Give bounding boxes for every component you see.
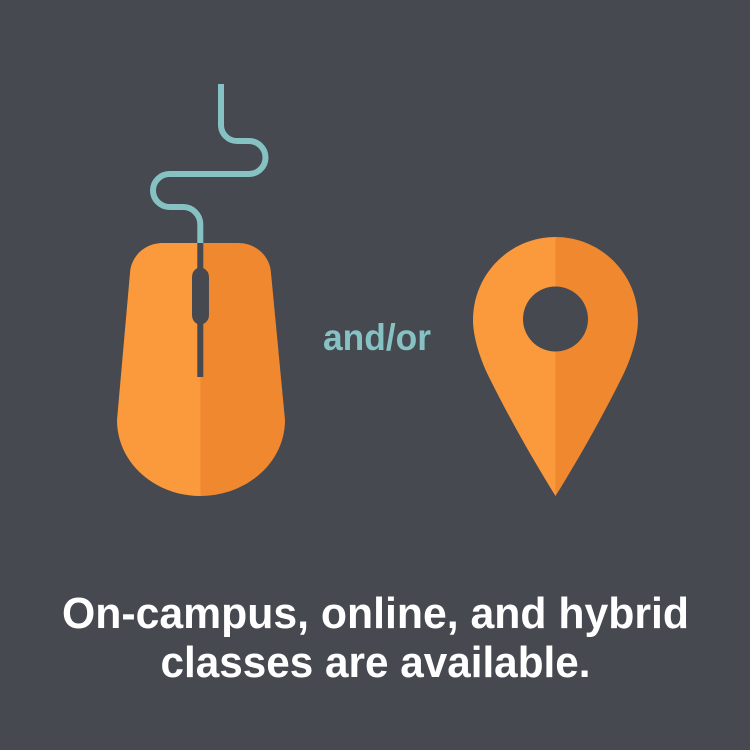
caption line 2: classes are available. (160, 638, 590, 687)
pin hole (523, 286, 588, 352)
caption line 1: On-campus, online, and hybrid (62, 589, 689, 638)
mouse body right half (200, 243, 285, 496)
icon: computer mouse (117, 84, 285, 496)
pin right half (556, 237, 638, 496)
caption (62, 589, 689, 687)
connector text: and/or: and/or (323, 317, 431, 358)
mouse cable (153, 84, 266, 244)
mouse body left half (117, 243, 200, 496)
pin left half (473, 237, 556, 496)
icon: location pin (473, 237, 638, 496)
mouse centre slot and scroll wheel (192, 243, 209, 377)
